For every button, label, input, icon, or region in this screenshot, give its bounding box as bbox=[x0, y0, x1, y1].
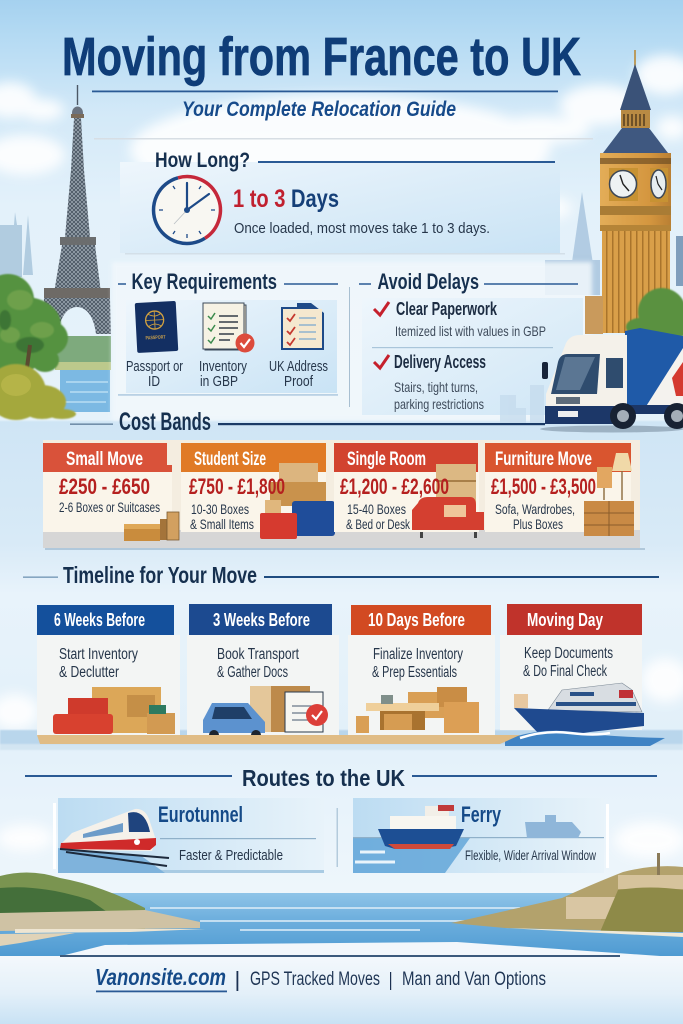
ground strip bbox=[37, 735, 520, 744]
subtitle: Your Complete Relocation Guide bbox=[182, 98, 456, 121]
card: 10 days before: Finalize Inventory bbox=[373, 646, 463, 663]
icon: dresser and lamps bbox=[584, 453, 634, 536]
item: delivery access bbox=[394, 352, 486, 412]
heading: avoid delays: Avoid Delays bbox=[378, 269, 479, 294]
card: 6 weeks before: & Declutter bbox=[59, 664, 119, 681]
icon: clock bbox=[154, 176, 220, 244]
far trees and river bbox=[55, 336, 111, 412]
icon: Eiffel Tower bbox=[43, 85, 111, 334]
card: student size: 10-30 Boxes bbox=[191, 501, 249, 517]
panel backdrop for requirements bbox=[112, 262, 592, 420]
distant skyline: left bbox=[0, 212, 33, 277]
coastline scene bbox=[0, 853, 683, 956]
card: 6 weeks before bbox=[37, 605, 180, 736]
card: 3 weeks before bbox=[187, 604, 339, 740]
panel: avoid delays bbox=[359, 269, 583, 415]
card: furniture move: Furniture Move bbox=[495, 449, 592, 470]
card: furniture move: £1,500 - £3,500 bbox=[491, 474, 596, 499]
footer bbox=[95, 964, 546, 992]
icon: tree on the right bbox=[626, 288, 683, 337]
distant skyline: right cathedral bbox=[545, 192, 683, 295]
panel: key requirements bbox=[118, 269, 338, 396]
card: furniture move: Sofa, Wardrobes, bbox=[495, 501, 575, 517]
item: delivery access: Stairs, tight turns, bbox=[394, 379, 478, 395]
icon: ferry on water bbox=[505, 683, 665, 746]
card: moving day: & Do Final Check bbox=[523, 663, 607, 680]
card: single room: Single Room bbox=[347, 449, 426, 470]
label: address proof: UK Address bbox=[269, 358, 328, 375]
icon: desk and boxes bbox=[356, 687, 479, 733]
icon: boxes and suitcases bbox=[260, 463, 335, 539]
card: small move: £250 - £650 bbox=[59, 474, 150, 499]
card: small move: Small Move bbox=[66, 449, 143, 470]
item: clear paperwork: Clear Paperwork bbox=[396, 299, 498, 319]
card: furniture move bbox=[485, 443, 634, 536]
card: small move: 2-6 Boxes or Suitcases bbox=[59, 499, 160, 515]
card: single room: 15-40 Boxes bbox=[347, 501, 406, 517]
footer: Man and Van Options bbox=[402, 969, 546, 990]
panel: ferry bbox=[353, 798, 609, 873]
label: inventory: Inventory bbox=[199, 358, 247, 375]
icon: train bbox=[60, 809, 169, 866]
icon: van and checklist bbox=[203, 686, 328, 740]
heading: cost bands: Cost Bands bbox=[119, 408, 211, 436]
footer: Vanonsite.com bbox=[95, 964, 226, 990]
icon: Big Ben bbox=[600, 50, 671, 333]
card: 10 days before bbox=[348, 605, 495, 736]
card: single room bbox=[334, 443, 484, 538]
panel: eurotunnel: Faster & Predictable bbox=[179, 847, 283, 864]
duration value: 1 to 3 Days bbox=[233, 185, 339, 213]
card: student size: & Small Items bbox=[190, 516, 254, 532]
card: 3 weeks before: Book Transport bbox=[217, 646, 300, 663]
panel: ferry: Ferry bbox=[461, 802, 502, 827]
icon: box and sofa bbox=[412, 464, 484, 538]
card: small move bbox=[43, 443, 179, 541]
icon: small boxes bbox=[124, 512, 179, 541]
sea strip behind timeline bbox=[0, 730, 683, 750]
icon: sofa and boxes bbox=[53, 687, 175, 734]
label: passport: ID bbox=[148, 373, 160, 390]
card: 10 days before: 10 Days Before bbox=[368, 610, 465, 630]
heading: key requirements: Key Requirements bbox=[132, 269, 277, 294]
heading: timeline: Timeline for Your Move bbox=[63, 562, 257, 588]
icon: side building by the tower bbox=[585, 296, 603, 334]
panel: timeline bbox=[37, 604, 665, 746]
card: 6 weeks before: Start Inventory bbox=[59, 646, 138, 663]
duration note: Once loaded, most moves take 1 to 3 days. bbox=[234, 220, 490, 237]
card: 3 weeks before: & Gather Docs bbox=[217, 664, 288, 681]
panel: eurotunnel: Eurotunnel bbox=[158, 802, 243, 827]
item: delivery access: Delivery Access bbox=[394, 352, 486, 372]
card: student size: Student Size bbox=[194, 449, 266, 470]
heading: how long: How Long? bbox=[155, 149, 250, 172]
card: moving day: Keep Documents bbox=[524, 645, 613, 662]
card: 10 days before: & Prep Essentials bbox=[372, 664, 457, 681]
footer: GPS Tracked Moves bbox=[250, 969, 380, 990]
icon: check bbox=[374, 302, 389, 315]
icon: removal truck bbox=[540, 328, 683, 432]
panel: cost bands bbox=[43, 440, 645, 550]
icon: trees on the left bbox=[0, 274, 76, 420]
panel: how long bbox=[120, 149, 560, 253]
card: student size: £750 - £1,800 bbox=[189, 474, 285, 499]
icon: check bbox=[374, 355, 389, 368]
item: delivery access: parking restrictions bbox=[394, 396, 484, 412]
card: student size bbox=[181, 443, 335, 539]
panel: ferry: Flexible, Wider Arrival Window bbox=[465, 848, 596, 863]
card: furniture move: Plus Boxes bbox=[513, 516, 563, 532]
icon: passport bbox=[135, 301, 178, 353]
label: inventory: in GBP bbox=[200, 373, 238, 390]
icon: distant ship bbox=[525, 815, 581, 838]
card: 6 weeks before: 6 Weeks Before bbox=[54, 610, 145, 630]
card: moving day bbox=[500, 604, 665, 746]
card: single room: £1,200 - £2,600 bbox=[340, 474, 449, 499]
card: single room: & Bed or Desk bbox=[346, 516, 411, 532]
card: moving day: Moving Day bbox=[527, 610, 603, 630]
item: clear paperwork: Itemized list with values in GBP bbox=[395, 323, 546, 339]
label: passport: Passport or bbox=[126, 358, 183, 375]
clouds bbox=[0, 55, 683, 858]
faint city bbox=[500, 385, 544, 425]
label: address proof: Proof bbox=[284, 373, 314, 390]
icon: ferry bbox=[378, 805, 464, 849]
icon: inventory checklist bbox=[203, 303, 254, 352]
item: clear paperwork bbox=[395, 299, 546, 339]
icon: passport: PASSPORT bbox=[145, 335, 166, 342]
heading: routes: Routes to the UK bbox=[242, 765, 405, 791]
card: 3 weeks before: 3 Weeks Before bbox=[213, 610, 310, 630]
icon: UK address proof bbox=[281, 303, 324, 350]
panel: eurotunnel bbox=[53, 798, 324, 873]
